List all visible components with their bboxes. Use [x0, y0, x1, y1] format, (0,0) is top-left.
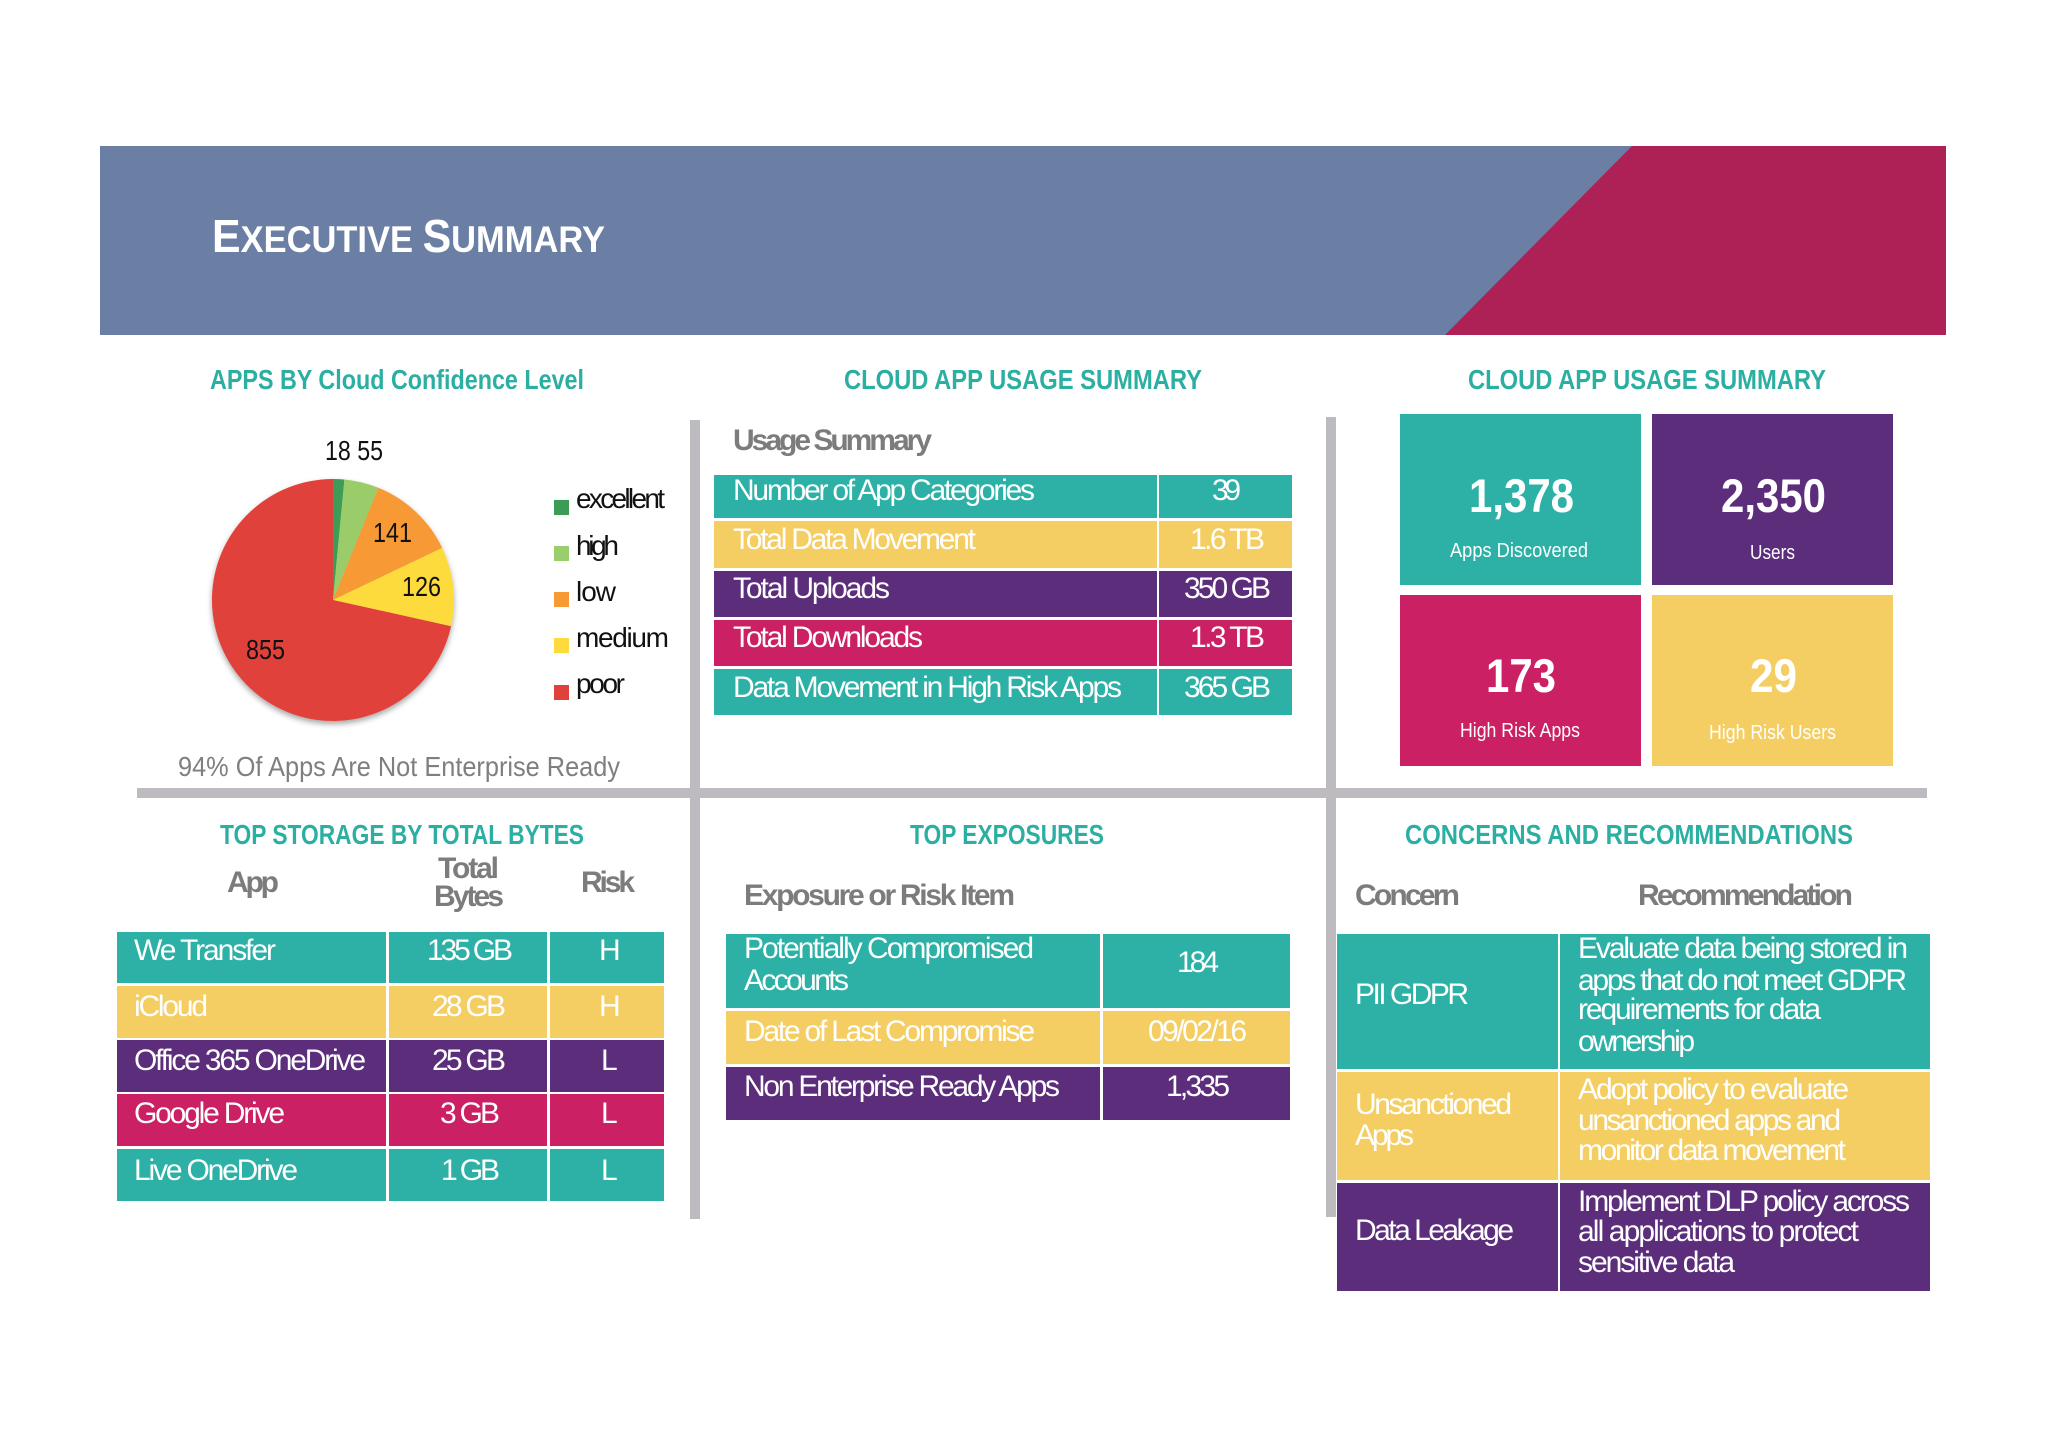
row: app categories	[714, 474, 1292, 518]
row: app categories: 39	[1212, 474, 1241, 507]
tile: users	[1652, 414, 1893, 585]
row: data leakage: all applications to protect	[1578, 1215, 1860, 1248]
pie chart: 141	[373, 517, 412, 548]
row: total downloads: 1.3 TB	[1190, 621, 1265, 654]
row: google drive: L	[601, 1097, 618, 1130]
row: office 365 onedrive: 25 GB	[432, 1044, 506, 1077]
tile: high risk apps: High Risk Apps	[1460, 720, 1580, 742]
tile: high risk users: High Risk Users	[1709, 722, 1836, 744]
row: last compromise date: 09/02/16	[1148, 1015, 1247, 1048]
row: icloud: iCloud	[134, 990, 208, 1023]
row: icloud: 28 GB	[432, 990, 506, 1023]
pie chart: 126	[402, 571, 441, 602]
row: data leakage: Implement DLP policy across	[1578, 1185, 1910, 1218]
panel: KPI tiles	[1400, 364, 1893, 766]
row: compromised accounts: Accounts	[744, 964, 849, 997]
row: live onedrive	[117, 1149, 664, 1201]
tile: apps discovered: 1,378	[1469, 469, 1574, 522]
grid divider lines	[137, 417, 1927, 1219]
table header: storage: Total	[438, 852, 499, 885]
pie chart	[212, 435, 454, 721]
row: PII GDPR: PII GDPR	[1355, 978, 1469, 1011]
row: google drive	[117, 1094, 664, 1146]
row: unsanctioned apps: Adopt policy to evaluate	[1578, 1073, 1849, 1106]
table header: storage: Risk	[581, 866, 635, 899]
row: total uploads: 350 GB	[1184, 572, 1271, 605]
pie legend: poor	[576, 668, 625, 699]
panel: top exposures	[726, 819, 1290, 1120]
row: PII GDPR: apps that do not meet GDPR	[1578, 964, 1907, 997]
row: data leakage: Data Leakage	[1355, 1214, 1514, 1247]
row: high risk movement: 365 GB	[1184, 671, 1271, 704]
table header: storage: Bytes	[434, 880, 504, 913]
row: live onedrive: L	[601, 1154, 618, 1187]
heading: concerns: CONCERNS AND RECOMMENDATIONS	[1405, 819, 1853, 850]
heading: apps by confidence: APPS BY Cloud Confidence Level	[210, 364, 584, 395]
heading: KPI tiles: CLOUD APP USAGE SUMMARY	[1468, 364, 1826, 395]
tile: users: Users	[1750, 542, 1795, 564]
row: icloud: H	[599, 990, 621, 1023]
row: unsanctioned apps	[1337, 1072, 1930, 1180]
row: unsanctioned apps: unsanctioned apps and	[1578, 1104, 1841, 1137]
panel: cloud app usage summary table	[714, 364, 1292, 715]
table header: concerns: Recommendation	[1638, 879, 1853, 912]
caption: enterprise readiness: 94% Of Apps Are Not Enterprise Ready	[178, 751, 620, 782]
pie chart: 855	[246, 634, 285, 665]
row: we transfer: H	[599, 934, 621, 967]
tile: high risk users	[1652, 595, 1893, 766]
table header: concerns	[1355, 879, 1853, 912]
row: app categories: Number of App Categories	[733, 474, 1035, 507]
row: non enterprise ready: Non Enterprise Ready Apps	[744, 1070, 1060, 1103]
row: office 365 onedrive	[117, 1040, 664, 1092]
row: PII GDPR: requirements for data	[1578, 993, 1821, 1026]
row: google drive: Google Drive	[134, 1097, 285, 1130]
row: data leakage	[1337, 1183, 1930, 1291]
header banner	[100, 146, 1946, 335]
tile: users: 2,350	[1721, 469, 1826, 522]
row: compromised accounts	[726, 932, 1290, 1008]
pie legend: low	[576, 576, 617, 607]
panel: concerns and recommendations	[1337, 819, 1930, 1291]
row: unsanctioned apps: Apps	[1355, 1119, 1414, 1152]
row: live onedrive: Live OneDrive	[134, 1154, 298, 1187]
row: icloud	[117, 986, 664, 1038]
row: we transfer: We Transfer	[134, 934, 276, 967]
row: PII GDPR	[1337, 932, 1930, 1069]
table header: storage: App	[227, 866, 279, 899]
row: unsanctioned apps: monitor data movement	[1578, 1134, 1847, 1167]
row: non enterprise ready: 1,335	[1166, 1070, 1230, 1103]
row: PII GDPR: Evaluate data being stored in	[1578, 932, 1908, 965]
row: total data movement	[714, 521, 1292, 568]
pie legend: high	[576, 530, 619, 561]
row: non enterprise ready	[726, 1067, 1290, 1120]
row: live onedrive: 1 GB	[441, 1154, 500, 1187]
row: PII GDPR: ownership	[1578, 1025, 1695, 1058]
tile: apps discovered: Apps Discovered	[1450, 540, 1588, 562]
pie legend	[554, 483, 669, 700]
pie legend: medium	[576, 622, 669, 653]
heading: usage summary: CLOUD APP USAGE SUMMARY	[844, 364, 1202, 395]
table title: Usage Summary	[733, 424, 932, 457]
row: office 365 onedrive: L	[601, 1044, 618, 1077]
row: last compromise date	[726, 1011, 1290, 1064]
pie chart: 18 55	[325, 435, 383, 466]
row: total data movement: Total Data Movement	[733, 523, 977, 556]
tile: high risk apps	[1400, 595, 1641, 766]
table header: storage	[227, 852, 635, 913]
title: EXECUTIVE SUMMARY	[212, 210, 605, 262]
row: we transfer	[117, 932, 664, 983]
row: data leakage: sensitive data	[1578, 1246, 1735, 1279]
panel: top storage	[117, 819, 664, 1201]
row: total downloads	[714, 620, 1292, 666]
row: google drive: 3 GB	[440, 1097, 500, 1130]
row: total uploads	[714, 571, 1292, 617]
row: total downloads: Total Downloads	[733, 621, 923, 654]
row: total uploads: Total Uploads	[733, 572, 890, 605]
tile: apps discovered	[1400, 414, 1641, 585]
row: compromised accounts: Potentially Compromised	[744, 932, 1034, 965]
panel: apps by cloud confidence level	[178, 364, 669, 782]
pie legend: excellent	[576, 483, 665, 514]
tile: high risk users: 29	[1750, 649, 1797, 702]
row: high risk movement: Data Movement in High Risk Apps	[733, 671, 1122, 704]
table header: concerns: Concern	[1355, 879, 1460, 912]
row: total data movement: 1.6 TB	[1190, 523, 1265, 556]
heading: top exposures: TOP EXPOSURES	[910, 819, 1104, 850]
row: compromised accounts: 184	[1177, 946, 1219, 979]
row: unsanctioned apps: Unsanctioned	[1355, 1088, 1512, 1121]
row: we transfer: 135 GB	[427, 934, 513, 967]
tile: high risk apps: 173	[1486, 649, 1556, 702]
row: office 365 onedrive: Office 365 OneDrive	[134, 1044, 366, 1077]
row: last compromise date: Date of Last Compromise	[744, 1015, 1035, 1048]
heading: top storage: TOP STORAGE BY TOTAL BYTES	[220, 819, 584, 850]
table header: exposures: Exposure or Risk Item	[744, 879, 1015, 912]
row: high risk movement	[714, 669, 1292, 715]
